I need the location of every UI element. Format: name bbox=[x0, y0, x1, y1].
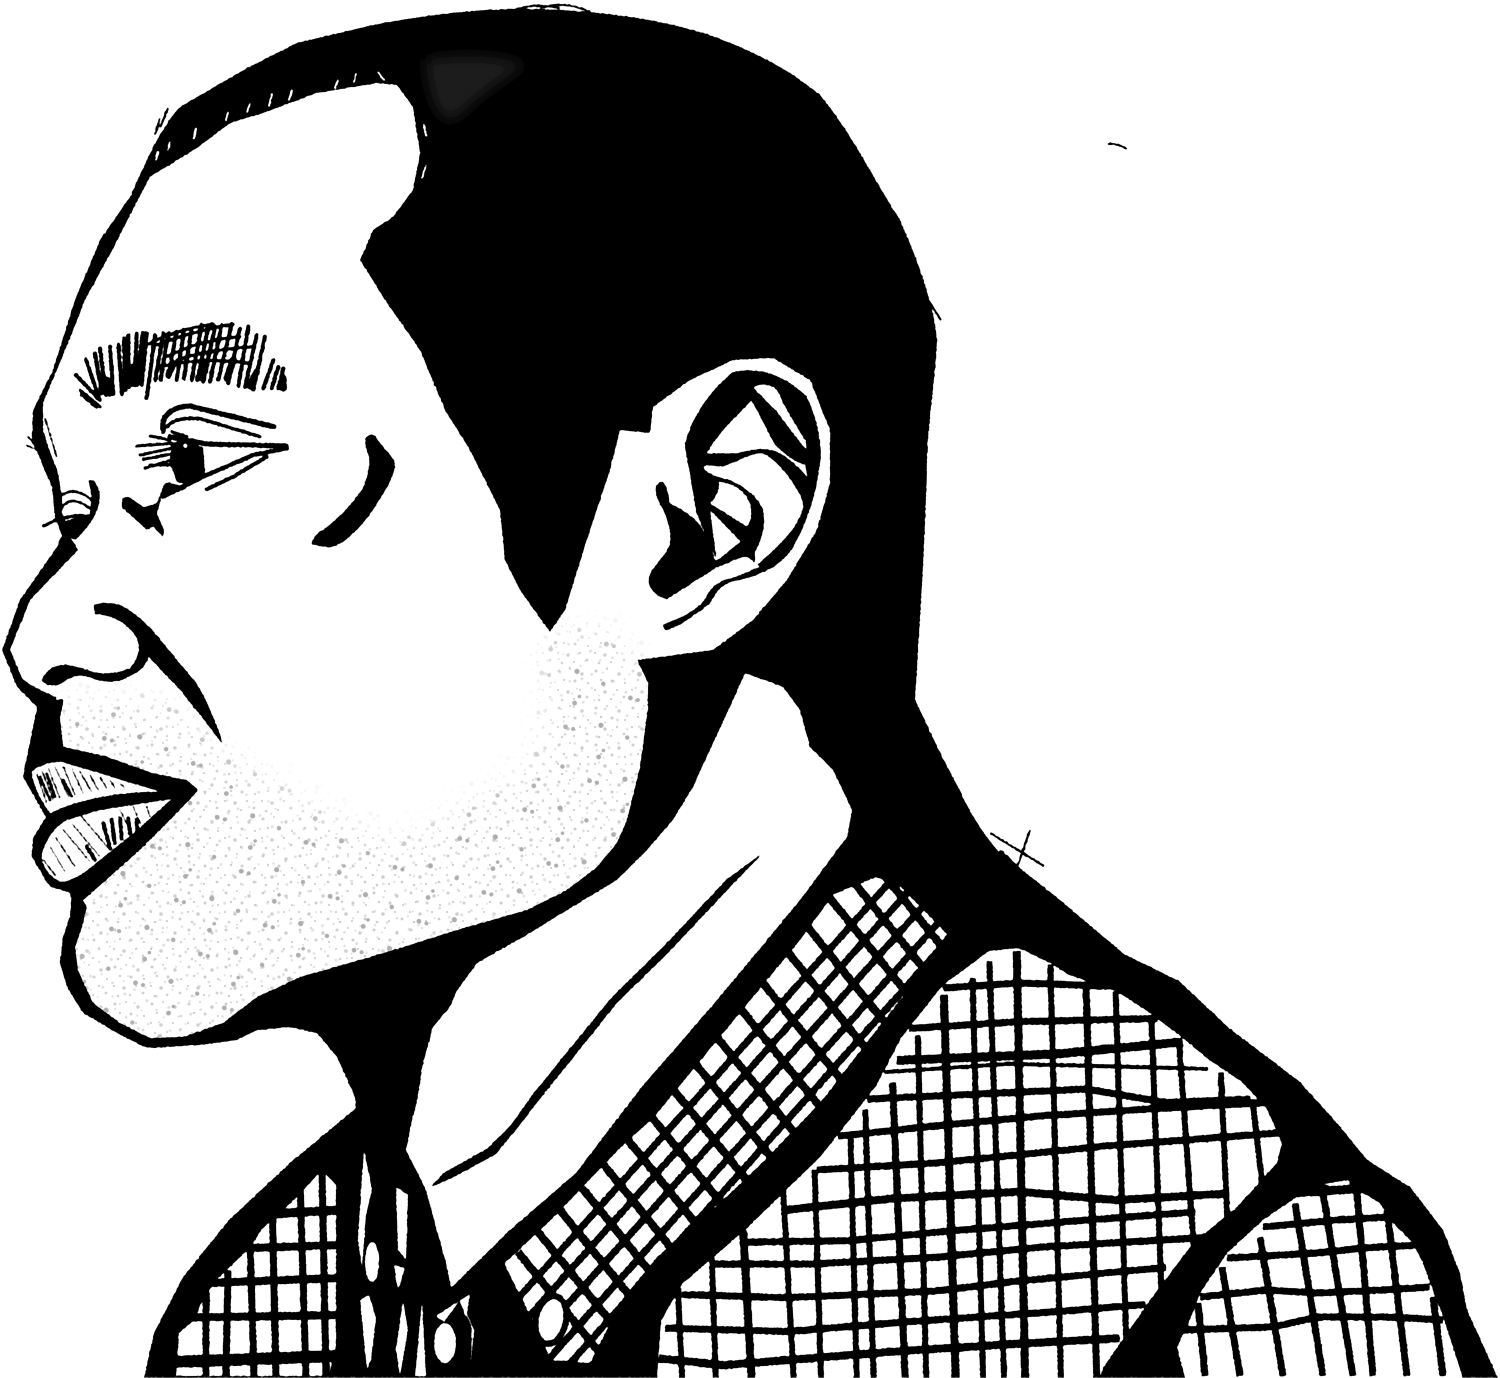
collar button bbox=[531, 1293, 571, 1347]
skin stipple bbox=[56, 618, 648, 1038]
nose and lips bbox=[23, 603, 223, 920]
neck crease bbox=[429, 853, 763, 1188]
cheek line bbox=[312, 435, 395, 547]
eyebrow bbox=[76, 324, 283, 407]
shirt body check pattern bbox=[657, 948, 1282, 1378]
hair highlight bbox=[425, 56, 525, 120]
lips bbox=[23, 698, 198, 920]
near eye bbox=[122, 406, 287, 537]
shirt placket and buttons bbox=[358, 1150, 474, 1376]
hair wisps and stray marks bbox=[155, 5, 1127, 885]
shirt collar bbox=[504, 877, 947, 1364]
shirt button bbox=[431, 1320, 459, 1366]
face bbox=[10, 83, 830, 1038]
hairline stubble bbox=[156, 72, 426, 178]
ear bbox=[648, 370, 821, 631]
shirt left panel bbox=[176, 1174, 337, 1377]
eyebrow, eyes and cheek line bbox=[26, 324, 395, 547]
nose line bbox=[42, 603, 223, 745]
neck bbox=[406, 673, 852, 1288]
far eye bbox=[26, 418, 100, 540]
shirt lower right panel bbox=[1177, 1180, 1463, 1378]
